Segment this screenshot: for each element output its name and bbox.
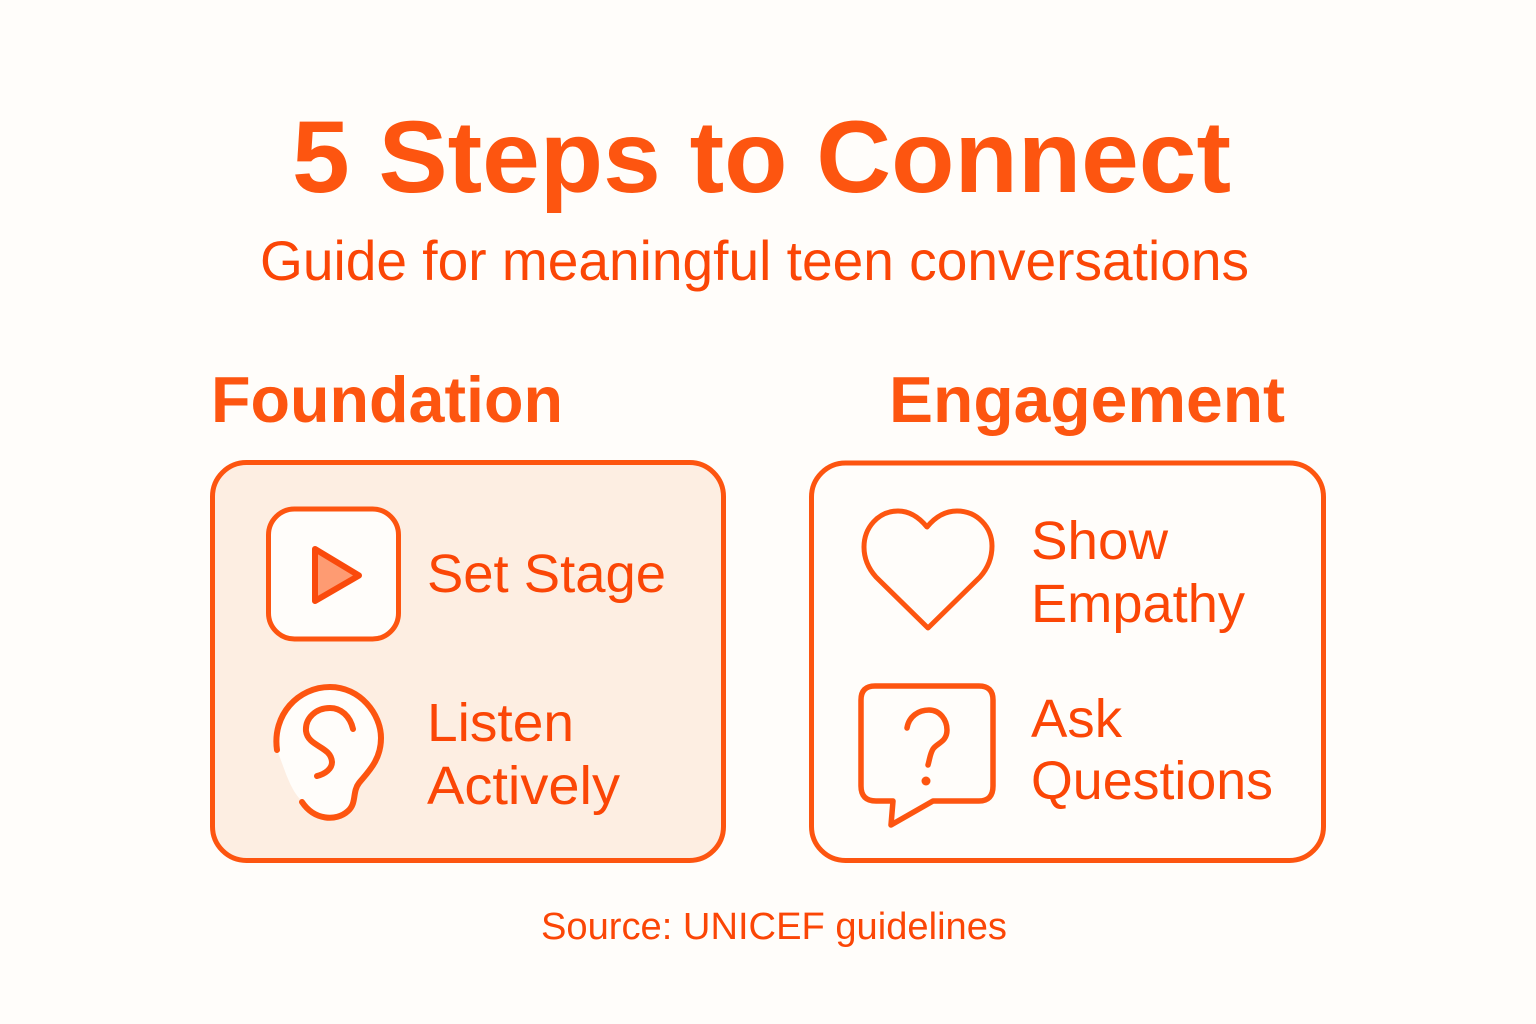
title: 5 Steps to Connect bbox=[292, 100, 1231, 214]
label: Listen Actively bbox=[427, 693, 620, 816]
icon: question bubble bbox=[861, 686, 993, 825]
label: Set Stage: Set Stage bbox=[427, 544, 666, 604]
heading: Engagement: Engagement bbox=[889, 363, 1285, 436]
source note: Source: UNICEF guidelines bbox=[541, 906, 1007, 948]
label: Show Empathy: Show bbox=[1031, 511, 1169, 571]
icon: play button bbox=[268, 509, 398, 639]
label: Show Empathy: Empathy bbox=[1031, 574, 1245, 634]
label: Ask Questions: Ask bbox=[1031, 689, 1123, 749]
label: Show Empathy bbox=[1031, 511, 1245, 634]
panel: Foundation bbox=[212, 462, 724, 860]
icon: ear bbox=[276, 687, 381, 818]
icon: heart bbox=[864, 511, 992, 628]
label: Ask Questions bbox=[1031, 689, 1273, 811]
label: Listen Actively: Listen bbox=[427, 693, 574, 753]
subtitle: Guide for meaningful teen conversations bbox=[260, 229, 1249, 292]
label: Listen Actively: Actively bbox=[427, 756, 620, 816]
panel: Engagement bbox=[812, 463, 1324, 860]
heading: Foundation: Foundation bbox=[211, 363, 563, 436]
label: Ask Questions: Questions bbox=[1031, 751, 1273, 811]
